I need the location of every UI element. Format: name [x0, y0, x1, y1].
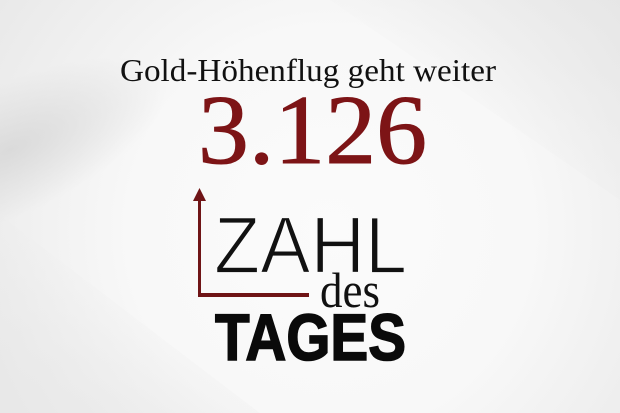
icon: upward arrow axis [193, 188, 309, 297]
logo word: TAGES: TAGES [215, 300, 406, 374]
big number: 3.126 [198, 76, 427, 185]
logo word: ZAHL: ZAHL [214, 201, 407, 291]
logo word: des: des [320, 262, 380, 318]
headline: Gold-Höhenflug geht weiter [120, 52, 496, 88]
